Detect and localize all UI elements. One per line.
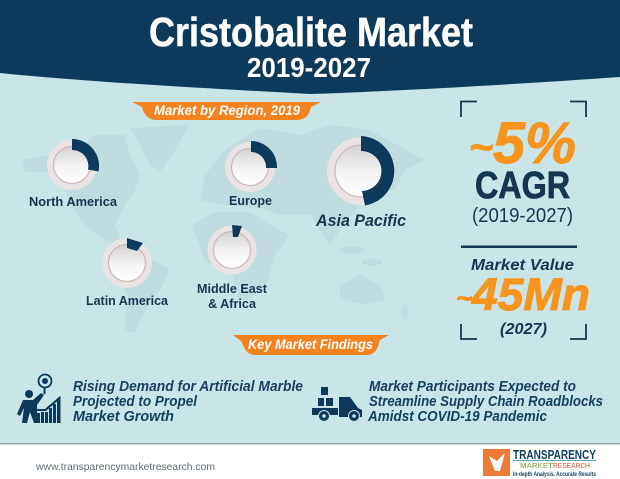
logo: Transparency Market Research	[483, 448, 597, 478]
stat: 5 percent: 5%	[493, 111, 576, 176]
donut: Europe	[225, 141, 277, 208]
finding text: supply chain	[367, 379, 603, 425]
icon: delivery truck with boxes	[312, 387, 362, 422]
finding text: artificial marble: Rising Demand for Artificial Marble	[73, 379, 303, 395]
heading ribbon: key market findings	[233, 335, 389, 355]
stat: 45 Mn: 45Mn	[471, 269, 590, 320]
finding text: artificial marble: Market Growth	[73, 409, 174, 425]
donut: North America	[29, 139, 118, 209]
label: Middle East and Africa: Middle East	[197, 281, 268, 296]
donut: Asia Pacific	[315, 136, 407, 230]
heading ribbon: market by region	[132, 102, 321, 120]
logo: Transparency Market Research: TRANSPARENCY	[513, 448, 597, 462]
finding text: artificial marble: Projected to Propel	[73, 394, 198, 410]
logo: Transparency Market Research: MARKET	[520, 461, 553, 470]
icon: person reaching target with growth chart	[17, 374, 61, 423]
stat label: market value: Market Value	[471, 257, 574, 274]
logo: Transparency Market Research: RESEARCH	[553, 461, 590, 470]
label: Asia Pacific: Asia Pacific	[315, 211, 407, 230]
finding text: artificial marble	[73, 379, 303, 425]
stat: CAGR: CAGR	[475, 165, 570, 207]
donut: Latin America	[86, 238, 169, 308]
finding text: supply chain: Streamline Supply Chain Roadblocks	[369, 394, 603, 410]
stat: CAGR period: (2019-2027)	[472, 205, 573, 227]
finding text: supply chain: Amidst COVID-19 Pandemic	[367, 409, 547, 425]
footer band	[0, 443, 620, 479]
title: Cristobalite Market	[149, 9, 473, 55]
logo: Transparency Market Research: In-depth Analysis. Accurate Results	[513, 472, 597, 478]
stat: market value year: (2027)	[500, 321, 547, 338]
website url: www.transparencymarketresearch.com	[35, 461, 215, 473]
heading ribbon: key market findings: Key Market Findings	[248, 337, 373, 352]
divider	[461, 246, 577, 248]
subtitle: 2019-2027	[247, 52, 371, 83]
header banner	[0, 0, 620, 94]
bracket frame	[461, 102, 586, 339]
finding text: supply chain: Market Participants Expected to	[369, 379, 576, 395]
stat: 45 Mn: ~	[456, 283, 472, 313]
heading ribbon: market by region: Market by Region, 2019	[154, 103, 300, 118]
donut: Middle East and Africa: & Africa	[208, 296, 257, 311]
donut: Middle East and Africa	[197, 225, 268, 311]
world map	[22, 125, 425, 333]
label: North America: North America	[29, 194, 118, 209]
stat: 5 percent: ~	[469, 127, 493, 169]
label: Europe: Europe	[229, 193, 272, 208]
label: Latin America: Latin America	[86, 293, 169, 308]
